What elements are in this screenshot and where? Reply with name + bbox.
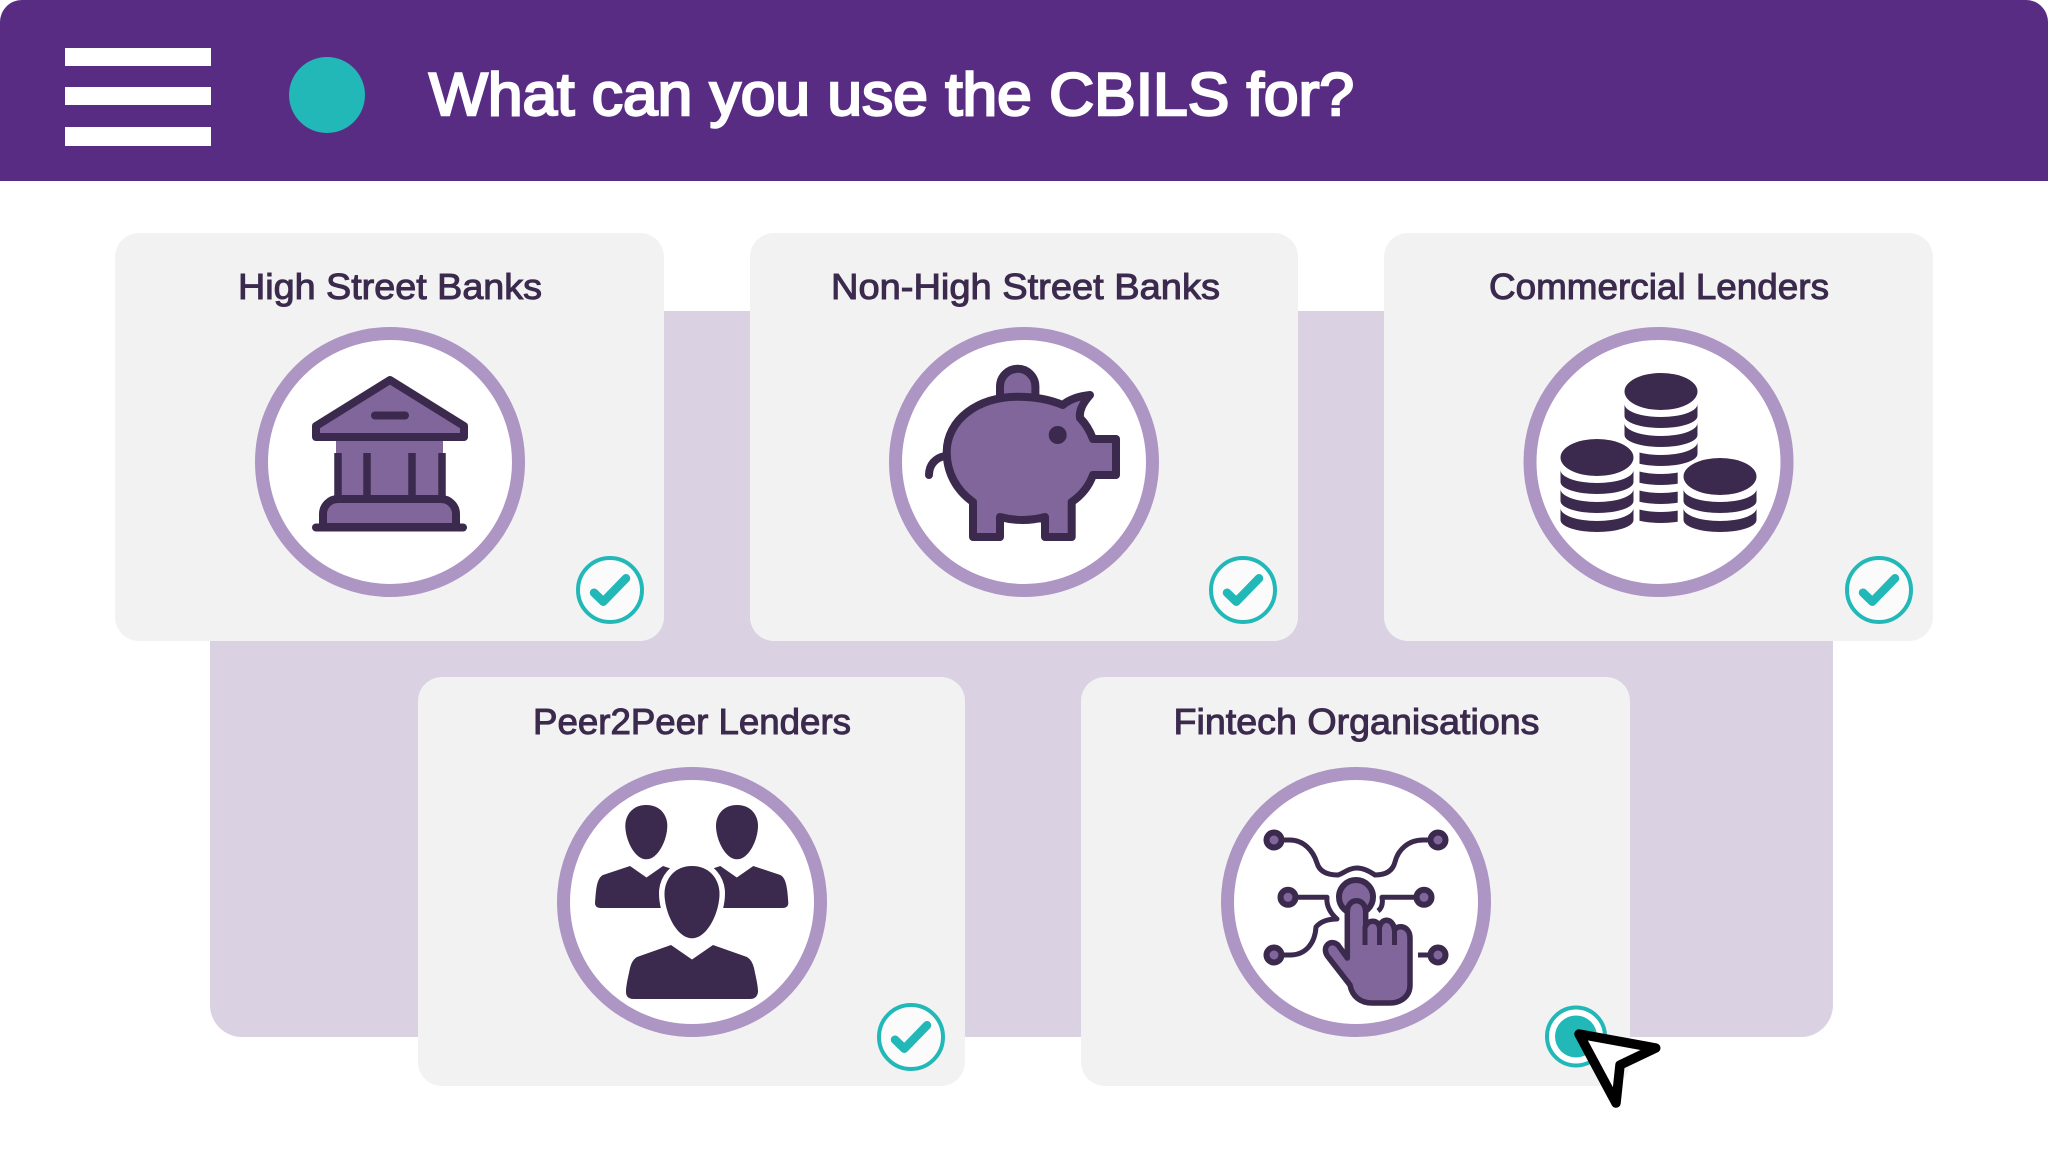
check badge [1211, 558, 1275, 622]
icon: bank [316, 380, 464, 528]
icon: touch hand and network [1266, 832, 1446, 1003]
icon: mouse cursor arrow [1579, 1034, 1656, 1103]
heading: Non-High Street Banks: Non-High Street Banks [831, 266, 1220, 307]
header bar [0, 0, 2048, 181]
panel: Commercial Lenders [1384, 233, 1933, 641]
icon ring [1228, 774, 1484, 1030]
panel: High Street Banks [115, 233, 664, 641]
heading: Commercial Lenders: Commercial Lenders [1489, 266, 1829, 307]
check badge [879, 1005, 943, 1069]
icon: hamburger menu [65, 48, 211, 146]
icon ring [896, 334, 1152, 590]
panel: Non-High Street Banks [750, 233, 1298, 641]
lavender background panel [210, 311, 1833, 1037]
heading: Fintech Organisations: Fintech Organisations [1174, 701, 1540, 742]
radio button selected [1547, 1008, 1605, 1066]
icon: three people [595, 805, 788, 999]
icon ring [262, 334, 518, 590]
icon: coin stacks [1560, 373, 1756, 532]
panel: Fintech Organisations [1081, 677, 1630, 1086]
heading: Peer2Peer Lenders: Peer2Peer Lenders [533, 701, 851, 742]
title: What can you use the CBILS for? [429, 61, 1354, 128]
check badge [578, 558, 642, 622]
icon ring [564, 774, 820, 1030]
heading: High Street Banks: High Street Banks [238, 266, 542, 307]
icon ring [1530, 334, 1787, 590]
check badge [1847, 558, 1911, 622]
panel: Peer2Peer Lenders [418, 677, 965, 1086]
icon: piggy bank [929, 369, 1116, 537]
icon: teal dot [289, 57, 365, 133]
